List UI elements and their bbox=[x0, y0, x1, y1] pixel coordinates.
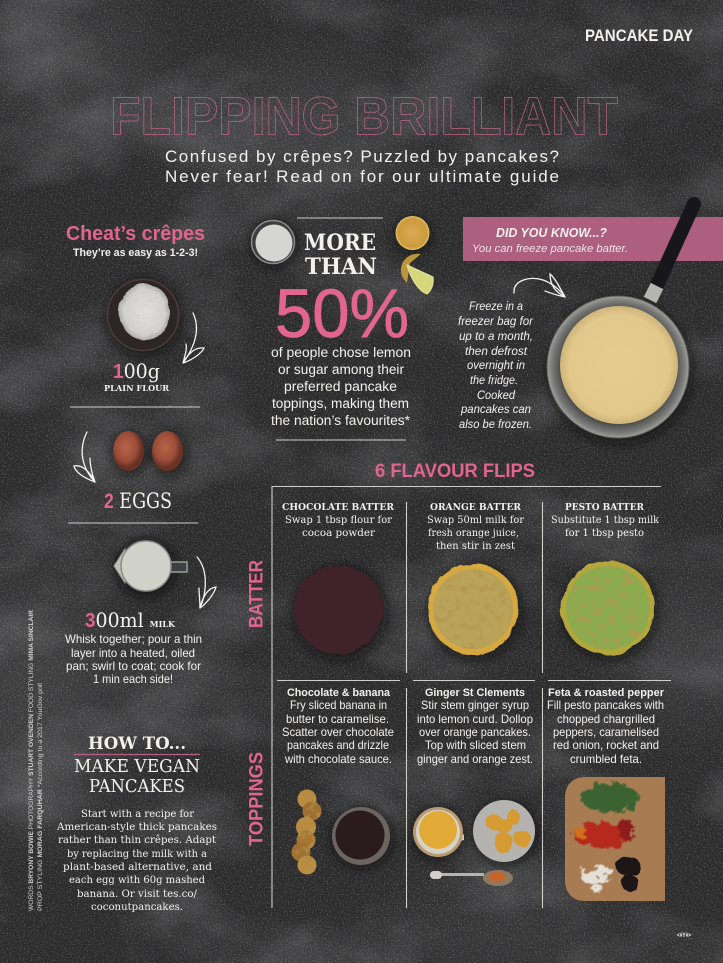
row label: toppings: TOPPINGS bbox=[246, 752, 268, 846]
heading: how to: HOW TO... bbox=[88, 734, 186, 754]
text: freeze instructions: up to a month, bbox=[459, 329, 533, 343]
text: freeze instructions: Cooked bbox=[477, 388, 515, 402]
card: ginger st clements: ginger and orange zest. bbox=[417, 752, 533, 766]
card: feta and roasted pepper: crumbled feta. bbox=[570, 752, 642, 766]
text: freeze instructions: pancakes can bbox=[460, 402, 531, 416]
illustration: spoon of zest bbox=[430, 870, 513, 886]
card: orange batter bbox=[427, 502, 525, 659]
text: lemon or sugar: the nation’s favourites* bbox=[271, 413, 411, 428]
step 2: 2 eggs: 2 EGGS bbox=[104, 489, 172, 513]
panel: how to make vegan pancakes bbox=[56, 734, 217, 913]
card: orange batter: fresh orange juice, bbox=[428, 527, 519, 539]
icon: bowl of flour bbox=[105, 280, 181, 356]
text: vegan pancake method: American-style thick pancakes bbox=[56, 821, 217, 833]
text: lemon or sugar: or sugar among their bbox=[278, 362, 404, 377]
panel: did you know banner: DID YOU KNOW...? bbox=[496, 226, 607, 240]
big stat: 50%: 50% bbox=[275, 275, 409, 352]
arrow: milk bbox=[197, 557, 216, 608]
text: freeze instructions: the fridge. bbox=[470, 373, 518, 387]
arrow: eggs bbox=[74, 432, 95, 482]
card: chocolate and banana: with chocolate sauce. bbox=[284, 752, 392, 766]
heading: how to: MAKE VEGAN bbox=[74, 756, 200, 777]
card: ginger st clements: Ginger St Clements bbox=[425, 687, 525, 699]
instructions: whisk together: pan; swirl to coat; cook for bbox=[66, 659, 201, 673]
text: lemon or sugar: toppings, making them bbox=[272, 396, 409, 411]
heading: more than: MORE bbox=[304, 230, 376, 256]
card: chocolate batter: Swap 1 tbsp flour for bbox=[285, 514, 393, 526]
panel: did you know banner bbox=[463, 217, 723, 261]
heading: how to bbox=[74, 734, 200, 797]
card: ginger st clements: over orange pancakes. bbox=[419, 725, 531, 739]
text: freeze instructions: freezer bag for bbox=[458, 314, 534, 328]
icon: lemons bbox=[396, 216, 433, 294]
panel: more than 50% stat bbox=[251, 216, 433, 440]
card: pesto batter: for 1 tbsp pesto bbox=[565, 527, 644, 539]
card: chocolate and banana: butter to caramelise. bbox=[286, 712, 389, 726]
panel: cheat's crepes bbox=[65, 223, 216, 686]
step 1: 100g plain flour: 100g bbox=[113, 359, 160, 383]
arrow: to pan bbox=[514, 274, 565, 297]
card: ginger st clements bbox=[412, 687, 537, 886]
card: orange batter: then stir in zest bbox=[436, 540, 516, 552]
heading: more than: THAN bbox=[305, 254, 377, 280]
heading: 6 flavour flips: 6 FLAVOUR FLIPS bbox=[375, 461, 535, 482]
card: feta and roasted pepper: chopped chargrilled bbox=[557, 712, 655, 726]
text: lemon or sugar: of people chose lemon bbox=[271, 345, 411, 360]
text: freeze instructions bbox=[458, 299, 534, 431]
card: chocolate and banana: Fry sliced banana in bbox=[290, 698, 387, 712]
icon: two eggs bbox=[112, 431, 188, 476]
heading: cheat's crepes: Cheat’s crêpes bbox=[66, 223, 205, 245]
illustration: chocolate sauce bowl bbox=[331, 807, 393, 869]
text: vegan pancake method: coconutpancakes. bbox=[91, 901, 183, 913]
pancake: pesto bbox=[561, 561, 658, 659]
card: pesto batter bbox=[551, 502, 660, 659]
page number placeholder: <#Y#> bbox=[677, 932, 691, 939]
card: feta and roasted pepper: Feta & roasted pepper bbox=[548, 687, 665, 699]
card: ginger st clements: Stir stem ginger syrup bbox=[421, 698, 529, 712]
heading: cheat's crepes: They’re as easy as 1-2-3! bbox=[73, 247, 198, 259]
card: ginger st clements: into lemon curd. Dollop bbox=[417, 712, 533, 726]
icon: bowl of sugar bbox=[251, 220, 297, 267]
illustration: fried banana slices bbox=[292, 790, 322, 874]
card: feta and roasted pepper: peppers, caramelised bbox=[553, 725, 659, 739]
text: vegan pancake method: rather than thin crêpes. Adapt bbox=[58, 834, 217, 846]
instructions: whisk together bbox=[65, 632, 202, 686]
illustration: frying pan with batter bbox=[547, 204, 694, 444]
text: vegan pancake method: each egg with 60g mashed bbox=[69, 874, 205, 886]
instructions: whisk together: 1 min each side! bbox=[93, 672, 173, 686]
credits: vertical text bbox=[28, 610, 44, 911]
text: vegan pancake method bbox=[56, 808, 217, 913]
heading: cheat's crepes bbox=[66, 223, 205, 259]
title: FLIPPING BRILLIANT bbox=[110, 86, 618, 146]
heading: how to: PANCAKES bbox=[89, 776, 185, 797]
grid lines bbox=[272, 486, 671, 908]
card: ginger st clements: Top with sliced stem bbox=[425, 738, 526, 752]
text: freeze instructions: then defrost bbox=[465, 344, 528, 358]
row label: batter: BATTER bbox=[246, 560, 268, 628]
card: chocolate batter: cocoa powder bbox=[302, 527, 376, 539]
illustration: lemon curd bowl bbox=[412, 807, 464, 860]
icon: jug of milk bbox=[114, 538, 187, 598]
card: feta and roasted pepper: Fill pesto pancakes with bbox=[547, 698, 664, 712]
instructions: whisk together: layer into a heated, oiled bbox=[71, 646, 195, 660]
step 1: 100g plain flour: PLAIN FLOUR bbox=[104, 384, 170, 394]
card: chocolate batter bbox=[282, 502, 394, 660]
heading: more than bbox=[304, 230, 377, 280]
step 1: 100g plain flour bbox=[104, 359, 170, 394]
credits: vertical text: WORDS BRYONY BOWIE PHOTOGRAPHY STUART OVENDEN FOOD STYLING MIMA SINCLAIR bbox=[28, 610, 35, 911]
subtitle: Never fear! Read on for our ultimate guide bbox=[165, 167, 559, 186]
card: orange batter: ORANGE BATTER bbox=[430, 502, 521, 513]
section tag: pancake day: PANCAKE DAY bbox=[585, 27, 693, 45]
card: orange batter: Swap 50ml milk for bbox=[427, 514, 525, 526]
text: freeze instructions: overnight in bbox=[467, 358, 525, 372]
credits: vertical text: PROP STYLING MORAG FARQUHAR *According to a 2017 YouGov poll bbox=[37, 682, 44, 911]
card: chocolate batter: CHOCOLATE BATTER bbox=[282, 502, 394, 513]
illustration: chopping board with toppings bbox=[565, 777, 665, 901]
text: lemon or sugar bbox=[271, 345, 411, 428]
card: pesto batter: Substitute 1 tbsp milk bbox=[551, 514, 660, 526]
card: feta and roasted pepper bbox=[547, 687, 665, 901]
pancake: orange bbox=[428, 564, 522, 659]
card: chocolate and banana bbox=[282, 687, 394, 874]
card: chocolate and banana: Scatter over chocolate bbox=[282, 725, 394, 739]
arrow: flour bbox=[183, 313, 204, 363]
pancake: chocolate bbox=[293, 566, 387, 660]
card: chocolate and banana: Chocolate & banana bbox=[287, 687, 391, 699]
panel: did you know banner: You can freeze pancake batter. bbox=[472, 243, 628, 255]
text: freeze instructions: also be frozen. bbox=[459, 417, 532, 431]
text: lemon or sugar: preferred pancake bbox=[284, 379, 397, 394]
instructions: whisk together: Whisk together; pour a thin bbox=[65, 632, 202, 646]
illustration: plate of ginger bbox=[473, 800, 537, 865]
subtitle: Confused by crêpes? Puzzled by pancakes? bbox=[165, 147, 559, 166]
text: freeze instructions: Freeze in a bbox=[469, 299, 523, 313]
text: vegan pancake method: plant-based alternative, and bbox=[63, 861, 212, 873]
card: pesto batter: PESTO BATTER bbox=[565, 502, 644, 513]
step 3: 300ml milk: 300ml MILK bbox=[85, 608, 176, 632]
card: chocolate and banana: pancakes and drizzle bbox=[287, 738, 389, 752]
subtitle bbox=[165, 147, 559, 186]
text: vegan pancake method: banana. Or visit tes.co/ bbox=[77, 888, 197, 900]
text: vegan pancake method: Start with a recipe for bbox=[81, 808, 195, 820]
text: vegan pancake method: by replacing the milk with a bbox=[67, 848, 207, 860]
card: feta and roasted pepper: red onion, rocket and bbox=[553, 738, 659, 752]
